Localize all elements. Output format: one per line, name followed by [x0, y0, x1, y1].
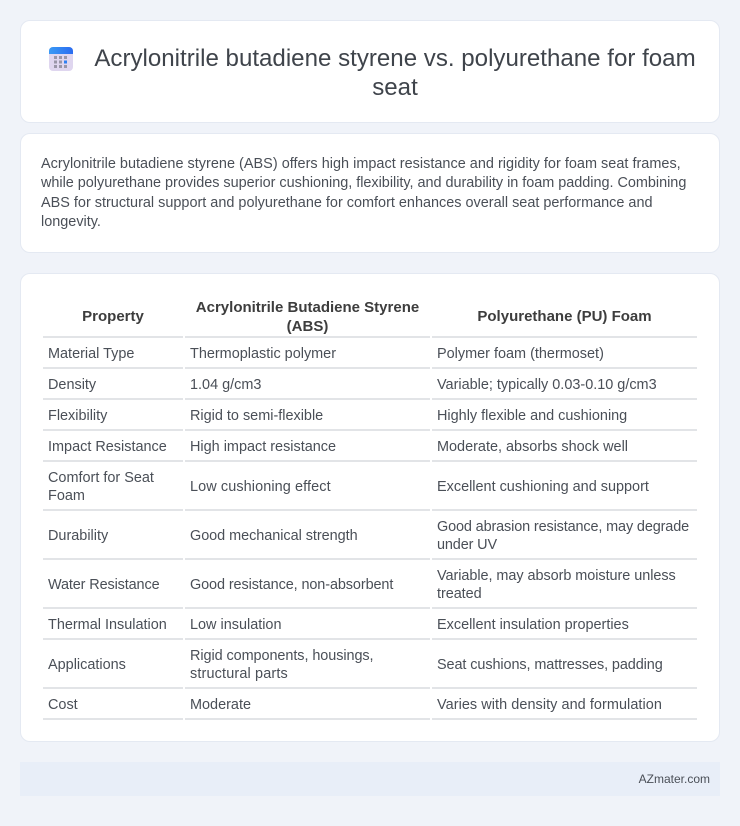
text: Highly flexible and cushioning [437, 408, 627, 424]
text: under UV [437, 537, 497, 553]
text: Variable, may absorb moisture unless [437, 568, 676, 584]
text: Good resistance, non-absorbent [190, 577, 393, 593]
row: water resistance [48, 568, 676, 602]
row: density [48, 377, 657, 393]
row: cost [48, 697, 662, 713]
text: Impact Resistance [48, 439, 167, 455]
table header [82, 299, 652, 335]
panel: introduction text [20, 133, 720, 253]
row: material type [48, 346, 604, 362]
text: Durability [48, 528, 108, 544]
comparison table [43, 299, 697, 720]
text: Excellent cushioning and support [437, 479, 649, 495]
text: structural parts [190, 666, 288, 682]
text: Moderate [190, 697, 251, 713]
icon: calendar [49, 47, 73, 71]
row: thermal insulation [48, 617, 629, 633]
text: Foam [48, 488, 85, 504]
row: flexibility [48, 408, 627, 424]
row: durability [48, 519, 689, 553]
text: Density [48, 377, 96, 393]
text: Property [82, 308, 144, 325]
text: (ABS) [287, 318, 328, 335]
text: Thermal Insulation [48, 617, 167, 633]
text: Comfort for Seat [48, 470, 154, 486]
text: Variable; typically 0.03-0.10 g/cm3 [437, 377, 657, 393]
intro paragraph: while polyurethane provides superior cushioning, flexibility, and durability in foam padding. Combining [41, 175, 686, 191]
text: Flexibility [48, 408, 107, 424]
intro paragraph: Acrylonitrile butadiene styrene (ABS) offers high impact resistance and rigidity for foam seat frames, [41, 156, 681, 172]
intro paragraph: longevity. [41, 214, 101, 230]
text: Moderate, absorbs shock well [437, 439, 628, 455]
title: Acrylonitrile butadiene styrene vs. polyurethane for foam seat [94, 45, 696, 101]
text: Polyurethane (PU) Foam [477, 308, 652, 325]
text: Rigid to semi-flexible [190, 408, 323, 424]
text: Cost [48, 697, 78, 713]
text: Excellent insulation properties [437, 617, 629, 633]
text: treated [437, 586, 482, 602]
text: Material Type [48, 346, 134, 362]
text: Varies with density and formulation [437, 697, 662, 713]
text: 1.04 g/cm3 [190, 377, 261, 393]
row: applications [48, 648, 663, 682]
text: Rigid components, housings, [190, 648, 374, 664]
intro paragraph [41, 156, 686, 230]
text: Acrylonitrile Butadiene Styrene [196, 299, 419, 316]
footer bar [20, 762, 720, 796]
intro paragraph: ABS for structural support and polyurethane for comfort enhances overall seat performance and [41, 195, 653, 211]
text: Low cushioning effect [190, 479, 331, 495]
text: Polymer foam (thermoset) [437, 346, 604, 362]
row: impact resistance [48, 439, 628, 455]
text: Seat cushions, mattresses, padding [437, 657, 663, 673]
text: High impact resistance [190, 439, 336, 455]
footer credit: AZmater.com [639, 772, 710, 786]
text: Low insulation [190, 617, 282, 633]
row: comfort for seat foam [48, 470, 649, 504]
text: Good abrasion resistance, may degrade [437, 519, 689, 535]
text: Good mechanical strength [190, 528, 358, 544]
text: Thermoplastic polymer [190, 346, 336, 362]
panel: comparison table [20, 273, 720, 742]
text: Water Resistance [48, 577, 159, 593]
text: Applications [48, 657, 126, 673]
panel: title card [20, 20, 720, 123]
